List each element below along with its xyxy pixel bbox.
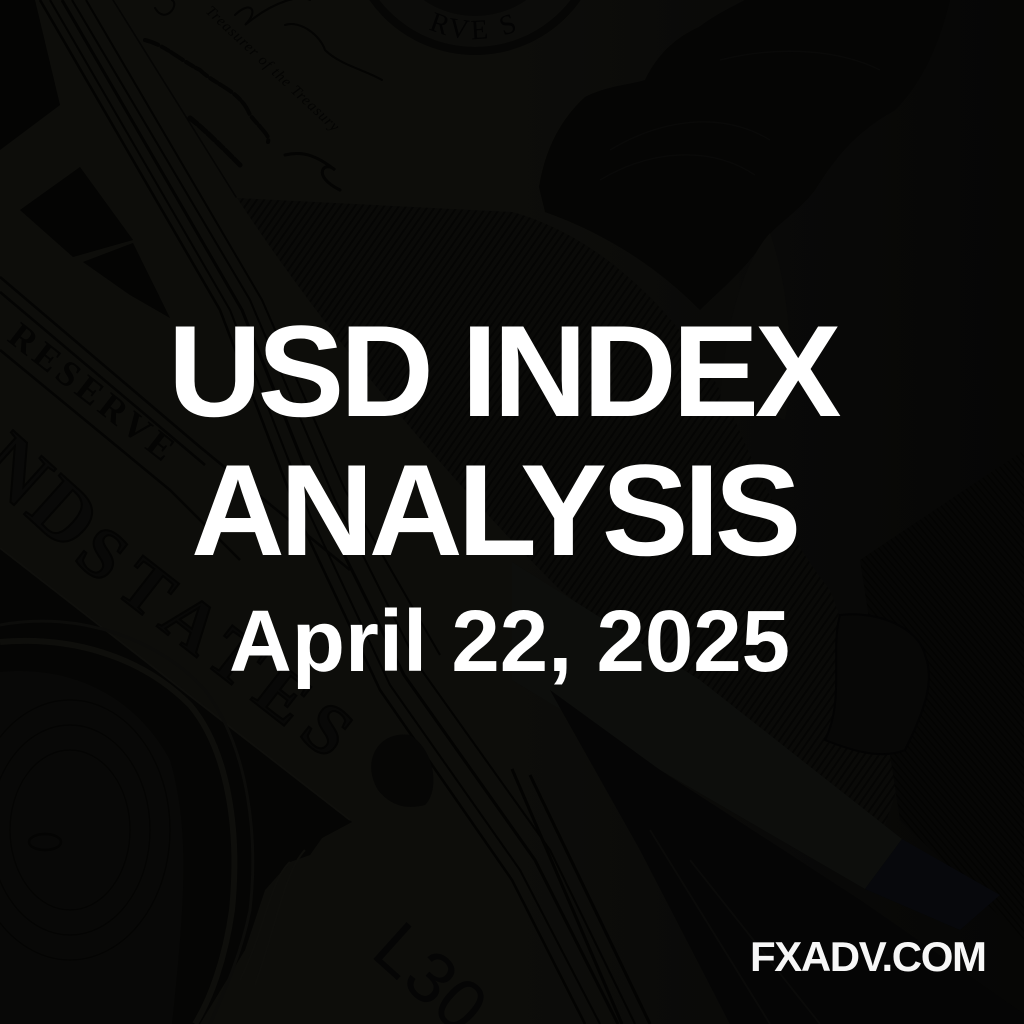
- bottom-left engraved frame and portrait: [0, 548, 352, 1024]
- signature and treasury lettering: [113, 0, 382, 197]
- title line one: USD INDEX: [168, 298, 837, 444]
- bill edge stack: [40, 0, 650, 1024]
- striped drapery: [237, 198, 900, 840]
- federal reserve seal: RVE S: [430, 12, 515, 39]
- diagonal folded paper band: [512, 562, 1000, 930]
- title line two: ANALYSIS: [191, 437, 796, 583]
- bill band lettering, left: [0, 277, 433, 807]
- date: April 22, 2025: [229, 593, 790, 690]
- bill band lettering, left: STATES: [62, 510, 377, 780]
- brand: FXADV.COM: FXADV.COM: [750, 933, 986, 980]
- right side tone: [512, 0, 1024, 1024]
- portrait hair, upper right: [539, 0, 950, 420]
- top-left dark corner and diamonds: [0, 0, 170, 318]
- bill band lettering, left: RESERVE: [1, 315, 186, 472]
- signature and treasury lettering: Treasurer of the Treasury: [202, 3, 343, 136]
- lower bill stack, dark: [550, 690, 1024, 1024]
- federal reserve seal: [430, 12, 515, 39]
- right-side shadowed coat: [825, 450, 1024, 940]
